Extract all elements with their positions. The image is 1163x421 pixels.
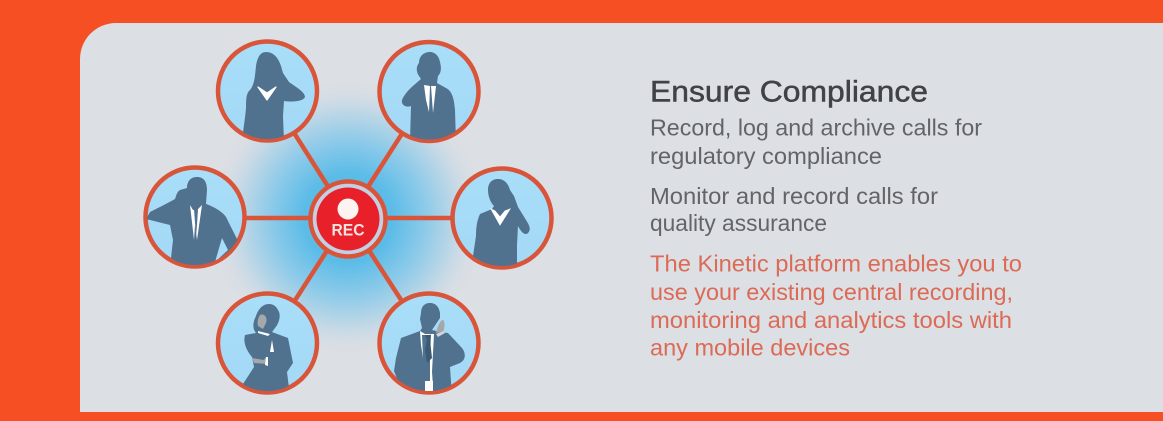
icon: man on phone, bottom right	[380, 294, 478, 396]
text block: recording	[650, 114, 982, 169]
text block: monitoring: quality assurance	[650, 210, 827, 236]
icon: record dot	[338, 198, 358, 220]
REC label: REC	[332, 220, 364, 240]
connector lines	[195, 91, 502, 343]
text block: Kinetic platform callout: any mobile devices	[650, 334, 850, 360]
blue glow behind recorder	[208, 78, 488, 358]
text block: Kinetic platform callout: use your existing central recording,	[650, 279, 1013, 305]
recorder badge	[310, 182, 386, 256]
icon: woman on phone, right	[452, 168, 552, 270]
icon: man on phone, left	[146, 168, 244, 270]
text block: recording: Record, log and archive calls for	[650, 114, 982, 140]
icon: man on phone, top right	[380, 42, 478, 142]
text block: Kinetic platform callout	[650, 250, 1022, 360]
text block: Kinetic platform callout: The Kinetic platform enables you to	[650, 250, 1022, 276]
icon: woman on phone, top left	[218, 42, 317, 142]
icon: woman on phone, bottom left	[218, 294, 317, 396]
text block: monitoring	[650, 183, 938, 236]
text block: Kinetic platform callout: monitoring and analytics tools with	[650, 307, 1012, 333]
heading: Ensure Compliance	[650, 76, 928, 108]
text block: recording: regulatory compliance	[650, 143, 882, 169]
text block: monitoring: Monitor and record calls for	[650, 183, 938, 209]
